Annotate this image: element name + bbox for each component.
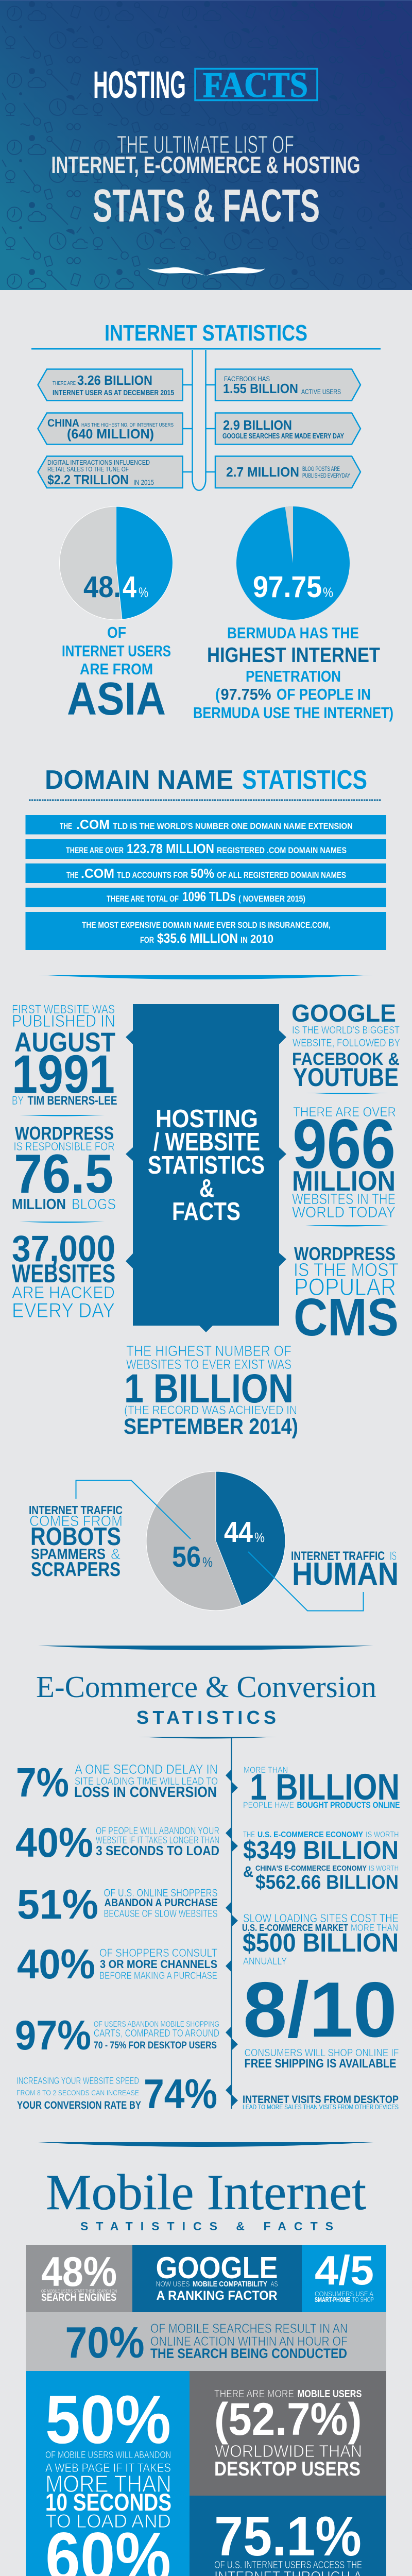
fact: first website 1991: FIRST WEBSITE WAS: [12, 1003, 115, 1016]
fact: 97 percent: OF USERS ABANDON MOBILE SHOPPING: [94, 2020, 219, 2029]
bar: most expensive domain: FOR: [140, 935, 154, 945]
fact: wordpress blogs: MILLION: [12, 1196, 66, 1213]
fact: wordpress blogs: [12, 1123, 116, 1213]
text: bermuda highest penetration: (: [215, 685, 220, 703]
callout: china: [38, 413, 183, 444]
fact: first website 1991: PUBLISHED IN: [12, 1011, 115, 1030]
fact: e-commerce economies: &: [243, 1863, 253, 1880]
fact: 40 percent abandon: OF PEOPLE WILL ABANDON YOUR: [96, 1826, 219, 1837]
bar: most expensive domain: [26, 912, 386, 950]
callout: 3.26 billion: 3.26 BILLION: [77, 372, 152, 388]
text: internet traffic robots: &: [111, 1546, 121, 1563]
callout: 3.26 billion: INTERNET USER AS AT DECEMBER 2015: [53, 389, 174, 397]
bar: 50 percent: TLD ACCOUNTS FOR: [117, 870, 188, 880]
fact: 1 billion online buyers: PEOPLE HAVE: [243, 1800, 294, 1810]
bar: registered domains: THERE ARE OVER: [66, 845, 124, 855]
tile: 48 percent search engines: [26, 2245, 132, 2312]
fact: first website 1991: BY: [12, 1094, 24, 1108]
fact: e-commerce economies: IS WORTH: [369, 1864, 399, 1873]
callout: retail sales: $2.2 TRILLION: [47, 472, 129, 487]
callout: facebook: FACEBOOK HAS: [224, 375, 270, 383]
fact: e-commerce economies: CHINA'S E-COMMERCE ECONOMY: [255, 1864, 367, 1873]
bar: most expensive domain: IN: [241, 935, 248, 945]
bar: total tlds: 1096 TLDs: [182, 889, 236, 904]
timeline spine with markers: [226, 1738, 238, 2109]
section: internet statistics: [31, 320, 381, 490]
pie chart: asia share: [60, 506, 173, 620]
tile: 50 percent and 60 percent: OF MOBILE USERS WILL ABANDON: [45, 2450, 171, 2460]
section: domain name statistics: [26, 765, 386, 950]
panel: hosting website statistics and facts: [126, 1004, 286, 1332]
tile: 50 percent and 60 percent: TO LOAD AND: [45, 2511, 171, 2532]
main title: [52, 131, 360, 232]
text: internet traffic human: IS: [390, 1549, 397, 1563]
text: of internet users are from asia: OF: [107, 623, 126, 641]
tile: 50 percent and 60 percent: 10 SECONDS: [45, 2488, 171, 2516]
pie chart: asia share: 4: [123, 570, 136, 604]
pie chart: internet traffic: %: [202, 1554, 213, 1570]
text: bermuda highest penetration: 97.75%: [220, 685, 271, 703]
fact: 966 million websites: WORLD TODAY: [292, 1204, 396, 1221]
fact: slow loading sites cost: $500 BILLION: [243, 1928, 399, 1957]
bar: registered domains: 123.78 MILLION: [127, 841, 214, 856]
panel: hosting website statistics and facts: FACTS: [172, 1198, 241, 1226]
fact: 97 percent: CARTS, COMPARED TO AROUND: [94, 2028, 219, 2039]
panel: hosting website statistics and facts: HOSTING: [156, 1105, 258, 1133]
text: internet traffic robots: SPAMMERS: [31, 1546, 106, 1563]
callout: retail sales: [38, 456, 183, 488]
pie chart: asia share: %: [139, 585, 148, 600]
bar: total tlds: THERE ARE TOTAL OF: [107, 894, 179, 904]
text: internet traffic human: INTERNET TRAFFIC: [291, 1549, 385, 1563]
bar: total tlds: ( NOVEMBER 2015): [238, 894, 305, 904]
fact: 51 percent: BECAUSE OF SLOW WEBSITES: [104, 1908, 217, 1920]
pie chart: internet traffic: 56: [172, 1540, 201, 1573]
tile: google ranking factor: [132, 2245, 302, 2312]
heading: domain name statistics: [45, 765, 367, 795]
tile: 48 percent search engines: OF MOBILE USERS START THEIR SEARCH ON: [41, 2289, 117, 2294]
bar: .com extension: THE: [60, 821, 72, 831]
callout: 3.26 billion: [38, 369, 183, 401]
bar: registered domains: [26, 839, 386, 859]
callout: google searches: GOOGLE SEARCHES ARE MADE EVERY DAY: [222, 432, 344, 440]
fact: wordpress blogs: BLOGS: [72, 1196, 116, 1213]
fact: 7 percent: [16, 1759, 218, 1805]
tile: 70 percent online action: ONLINE ACTION WITHIN AN HOUR OF: [150, 2334, 348, 2349]
heading: internet statistics: INTERNET STATISTICS: [105, 320, 307, 346]
fact: 40 percent abandon: [15, 1820, 219, 1866]
logo: HOSTING: [93, 63, 186, 106]
callout: retail sales: DIGITAL INTERACTIONS INFLUENCED: [47, 459, 150, 466]
fact: 97 percent: [15, 2012, 219, 2059]
fact: 51 percent: OF U.S. ONLINE SHOPPERS: [104, 1887, 217, 1899]
fact: 74 percent: INCREASING YOUR WEBSITE SPEED: [16, 2076, 139, 2086]
fact: 40 percent channels: 40%: [17, 1941, 95, 1988]
fact: 97 percent: 70 - 75% FOR DESKTOP USERS: [94, 2040, 217, 2051]
bar: 50 percent: THE: [66, 870, 78, 880]
tile: 52.7 percent mobile users: THERE ARE MORE: [214, 2388, 294, 2400]
text: internet traffic human: HUMAN: [292, 1556, 399, 1592]
text: bermuda highest penetration: [193, 624, 393, 722]
tile: 48 percent search engines: SEARCH ENGINES: [41, 2292, 116, 2303]
callout: china: (640 MILLION): [67, 426, 154, 442]
fact: 51 percent: ABANDON A PURCHASE: [104, 1897, 217, 1909]
fact: 7 percent: 7%: [16, 1759, 69, 1805]
bar: most expensive domain: $35.6 MILLION: [157, 930, 238, 946]
panel: hosting website statistics and facts: &: [199, 1175, 214, 1202]
tile: 52.7 percent mobile users: (52.7%): [214, 2393, 362, 2445]
fact: 40 percent abandon: 3 SECONDS TO LOAD: [96, 1843, 219, 1858]
fact: desktop visits: [243, 2094, 399, 2111]
fact: slow loading sites cost: ANNUALLY: [243, 1956, 287, 1967]
bar: total tlds: [26, 888, 386, 907]
callout: blog posts: PUBLISHED EVERYDAY: [302, 473, 350, 479]
fact: 74 percent: FROM 8 TO 2 SECONDS CAN INCREASE: [16, 2089, 139, 2097]
callout: facebook: [215, 369, 360, 401]
heading: mobile internet: STATISTICS & FACTS: [80, 2219, 333, 2233]
tile: 50 percent and 60 percent: 50%: [45, 2382, 171, 2458]
fact: slow loading sites cost: [242, 1911, 399, 1967]
text: internet traffic robots: INTERNET TRAFFIC: [29, 1503, 123, 1517]
tile: 4 of 5 consumers: TO SHOP: [352, 2296, 374, 2303]
callout: google searches: 2.9 BILLION: [223, 417, 292, 433]
text: bermuda highest penetration: PENETRATION: [246, 667, 341, 685]
fact: 8 of 10 free shipping: 8/10: [243, 1966, 397, 2054]
panel: hosting website statistics and facts: STATISTICS: [148, 1151, 265, 1179]
tile: 50 percent and 60 percent: MORE THAN: [45, 2470, 171, 2497]
tile: 50 percent and 60 percent: A WEB PAGE IF IT TAKES: [45, 2461, 171, 2475]
callout: 3.26 billion: THERE ARE: [53, 380, 76, 386]
bar: most expensive domain: 2010: [250, 933, 273, 945]
fact: 966 million websites: [292, 1104, 396, 1221]
text: internet traffic robots: [29, 1503, 123, 1581]
header banner: [0, 0, 412, 290]
fact: 1 billion websites: [124, 1343, 298, 1439]
fact: first website 1991: [12, 1003, 117, 1108]
fact: slow loading sites cost: MORE THAN: [351, 1923, 398, 1933]
fact: 74 percent: YOUR CONVERSION RATE BY: [17, 2099, 141, 2111]
tile: 4 of 5 consumers: SMART-PHONE: [315, 2296, 350, 2303]
fact: wordpress cms: POPULAR: [294, 1273, 396, 1300]
fact: wordpress blogs: WORDPRESS: [15, 1123, 114, 1144]
bar: most expensive domain: THE MOST EXPENSIVE DOMAIN NAME EVER SOLD IS INSURANCE.COM,: [82, 920, 331, 930]
tile: 75.1 percent mobile device: [190, 2496, 386, 2576]
fact: wordpress cms: [294, 1243, 399, 1347]
panel: hosting website statistics and facts: / WEBSITE: [153, 1128, 260, 1156]
tile: 75.1 percent mobile device: 75.1%: [214, 2505, 362, 2568]
text: of internet users are from asia: ASIA: [67, 673, 166, 725]
fact: google biggest website: GOOGLE: [291, 1000, 396, 1027]
text: bermuda highest penetration: OF PEOPLE IN: [277, 685, 371, 703]
fact: 1 billion online buyers: MORE THAN: [244, 1765, 288, 1775]
tile: google ranking factor: NOW USES: [156, 2280, 190, 2289]
fact: 7 percent: LOSS IN CONVERSION: [74, 1784, 217, 1801]
fact: slow loading sites cost: U.S. E-COMMERCE MARKET: [242, 1923, 348, 1933]
fact: wordpress blogs: IS RESPONSIBLE FOR: [13, 1140, 114, 1153]
bar: registered domains: REGISTERED .COM DOMAIN NAMES: [217, 845, 347, 855]
text: internet traffic robots: SCRAPERS: [31, 1558, 121, 1581]
text: bermuda highest penetration: HIGHEST INTERNET: [207, 643, 380, 667]
fact: wordpress blogs: 76.5: [14, 1143, 113, 1205]
tile: google ranking factor: MOBILE COMPATIBILITY: [193, 2280, 267, 2289]
fact: first website 1991: AUGUST: [14, 1027, 115, 1058]
heading: domain name statistics: DOMAIN NAME: [45, 765, 233, 795]
fact: e-commerce economies: $349 BILLION: [243, 1836, 399, 1865]
fact: 966 million websites: MILLION: [292, 1165, 396, 1197]
fact: websites hacked: 37,000: [12, 1229, 115, 1269]
fact: websites hacked: [12, 1229, 115, 1322]
tile: 75.1 percent mobile device: OF U.S. INTERNET USERS ACCESS THE: [214, 2560, 362, 2571]
tile: 70 percent online action: THE SEARCH BEING CONDUCTED: [150, 2346, 347, 2361]
fact: 40 percent channels: OF SHOPPERS CONSULT: [99, 1946, 217, 1959]
tile: google ranking factor: GOOGLE: [156, 2251, 278, 2285]
fact: 40 percent channels: [17, 1941, 217, 1988]
heading: e-commerce and conversion: [36, 1670, 376, 1728]
fact: 97 percent: 97%: [15, 2012, 91, 2059]
tile: 4 of 5 consumers: CONSUMERS USE A: [315, 2290, 374, 2298]
callout: china: HAS THE HIGHEST NO. OF INTERNET USERS: [81, 422, 174, 428]
fact: 40 percent channels: BEFORE MAKING A PURCHASE: [99, 1971, 217, 1981]
pie chart: bermuda penetration: [236, 506, 350, 620]
pie chart: internet traffic: [146, 1471, 285, 1611]
fact: e-commerce economies: $562.66 BILLION: [255, 1872, 399, 1893]
fact: 1 billion websites: 1 BILLION: [124, 1365, 294, 1411]
fact: 1 billion websites: (THE RECORD WAS ACHIEVED IN: [124, 1403, 297, 1417]
fact: e-commerce economies: [243, 1831, 399, 1893]
fact: 40 percent channels: 3 OR MORE CHANNELS: [100, 1958, 217, 1971]
text: of internet users are from asia: ARE FROM: [80, 660, 153, 678]
callout: facebook: ACTIVE USERS: [301, 387, 341, 396]
text: bermuda highest penetration: BERMUDA HAS THE: [227, 624, 359, 642]
fact: 1 billion websites: THE HIGHEST NUMBER OF: [126, 1343, 291, 1360]
arrow: robots callout: [76, 1481, 191, 1539]
callout: retail sales: RETAIL SALES TO THE TUNE OF: [47, 465, 129, 473]
fact: websites hacked: EVERY DAY: [12, 1299, 115, 1322]
tile: google ranking factor: AS: [271, 2280, 278, 2289]
fact: google biggest website: [291, 1000, 400, 1092]
tile: 50 percent and 60 percent: [26, 2371, 190, 2576]
main title: THE ULTIMATE LIST OF: [117, 131, 294, 159]
text: internet traffic robots: ROBOTS: [30, 1523, 121, 1551]
bar: 50 percent: OF ALL REGISTERED DOMAIN NAMES: [217, 870, 346, 880]
tube connector: [183, 350, 215, 490]
fact: 1 billion websites: WEBSITES TO EVER EXIST WAS: [126, 1357, 291, 1372]
bar: .com extension: .COM: [76, 818, 110, 832]
pie chart: asia share: 48.: [83, 570, 121, 604]
callout: blog posts: BLOG POSTS ARE: [302, 466, 340, 472]
fact: first website 1991: TIM BERNERS-LEE: [28, 1094, 117, 1108]
pie chart: bermuda penetration: %: [323, 585, 333, 600]
bar: .com extension: [26, 815, 386, 835]
fact: e-commerce economies: IS WORTH: [366, 1831, 399, 1839]
bar: 50 percent: [26, 863, 386, 883]
fact: 966 million websites: THERE ARE OVER: [293, 1104, 396, 1120]
callout: retail sales: IN 2015: [133, 479, 154, 486]
callout: blog posts: [215, 456, 360, 488]
bar: 50 percent: 50%: [191, 867, 214, 881]
fact: e-commerce economies: U.S. E-COMMERCE ECONOMY: [258, 1831, 363, 1839]
tile: 52.7 percent mobile users: [190, 2371, 386, 2496]
tile: 52.7 percent mobile users: DESKTOP USERS: [214, 2458, 360, 2480]
logo: FACTS: [203, 65, 308, 105]
tile: 70 percent online action: 70%: [65, 2318, 144, 2367]
pie chart: bermuda penetration: 97.75: [253, 570, 322, 604]
callout: facebook: 1.55 BILLION: [223, 381, 298, 396]
fact: 51 percent: [17, 1882, 217, 1928]
tile: 70 percent online action: OF MOBILE SEARCHES RESULT IN AN: [150, 2321, 348, 2336]
fact: 40 percent abandon: 40%: [15, 1820, 93, 1866]
fact: first website 1991: 1991: [12, 1044, 115, 1105]
callout: china: CHINA: [47, 417, 79, 429]
bar: .com extension: TLD IS THE WORLD'S NUMBER ONE DOMAIN NAME EXTENSION: [113, 821, 353, 831]
tile: 48 percent search engines: 48%: [41, 2249, 117, 2295]
fact: 74 percent: 74%: [144, 2071, 217, 2117]
heading: mobile internet: Mobile Internet: [46, 2164, 366, 2221]
tile: 52.7 percent mobile users: WORLDWIDE THAN: [215, 2442, 362, 2461]
fact: wordpress cms: IS THE MOST: [294, 1259, 399, 1280]
tile: 4 of 5 consumers: [302, 2245, 386, 2312]
arrow: human callout: [248, 1552, 364, 1611]
text: internet traffic robots: COMES FROM: [29, 1513, 123, 1530]
pie chart: internet traffic: %: [254, 1530, 265, 1545]
tile: 4 of 5 consumers: 4/5: [315, 2247, 374, 2293]
fact: 966 million websites: 966: [293, 1105, 396, 1183]
heading: e-commerce and conversion: E-Commerce & Conversion: [36, 1670, 376, 1704]
fact: 51 percent: 51%: [17, 1882, 98, 1928]
fact: 74 percent: [16, 2071, 217, 2117]
fact: e-commerce economies: THE: [243, 1831, 255, 1839]
fact: wordpress cms: CMS: [294, 1287, 399, 1347]
heading: e-commerce and conversion: STATISTICS: [136, 1707, 276, 1728]
fact: 7 percent: SITE LOADING TIME WILL LEAD TO: [75, 1776, 218, 1787]
pie chart: internet traffic: 44: [224, 1516, 253, 1549]
fact: 7 percent: A ONE SECOND DELAY IN: [75, 1761, 218, 1777]
tile: 52.7 percent mobile users: MOBILE USERS: [298, 2388, 362, 2400]
fact: websites hacked: WEBSITES: [12, 1259, 115, 1288]
bar: 50 percent: .COM: [81, 867, 114, 881]
text: of internet users are from asia: [62, 623, 171, 725]
fact: 40 percent abandon: WEBSITE IF IT TAKES LONGER THAN: [96, 1835, 219, 1846]
tile: google ranking factor: A RANKING FACTOR: [157, 2289, 277, 2303]
fact: google biggest website: FACEBOOK &: [292, 1049, 400, 1069]
heading: domain name statistics: STATISTICS: [242, 765, 367, 795]
callout: google searches: [215, 413, 360, 444]
text: of internet users are from asia: INTERNET USERS: [62, 642, 171, 660]
fact: wordpress cms: WORDPRESS: [294, 1243, 396, 1264]
white swoosh ornament: [147, 267, 265, 276]
fact: 1 billion websites: SEPTEMBER 2014): [124, 1414, 298, 1439]
fact: websites hacked: ARE HACKED: [12, 1283, 115, 1302]
callout: blog posts: 2.7 MILLION: [226, 464, 299, 480]
tile: 70 percent online action: [26, 2312, 386, 2371]
